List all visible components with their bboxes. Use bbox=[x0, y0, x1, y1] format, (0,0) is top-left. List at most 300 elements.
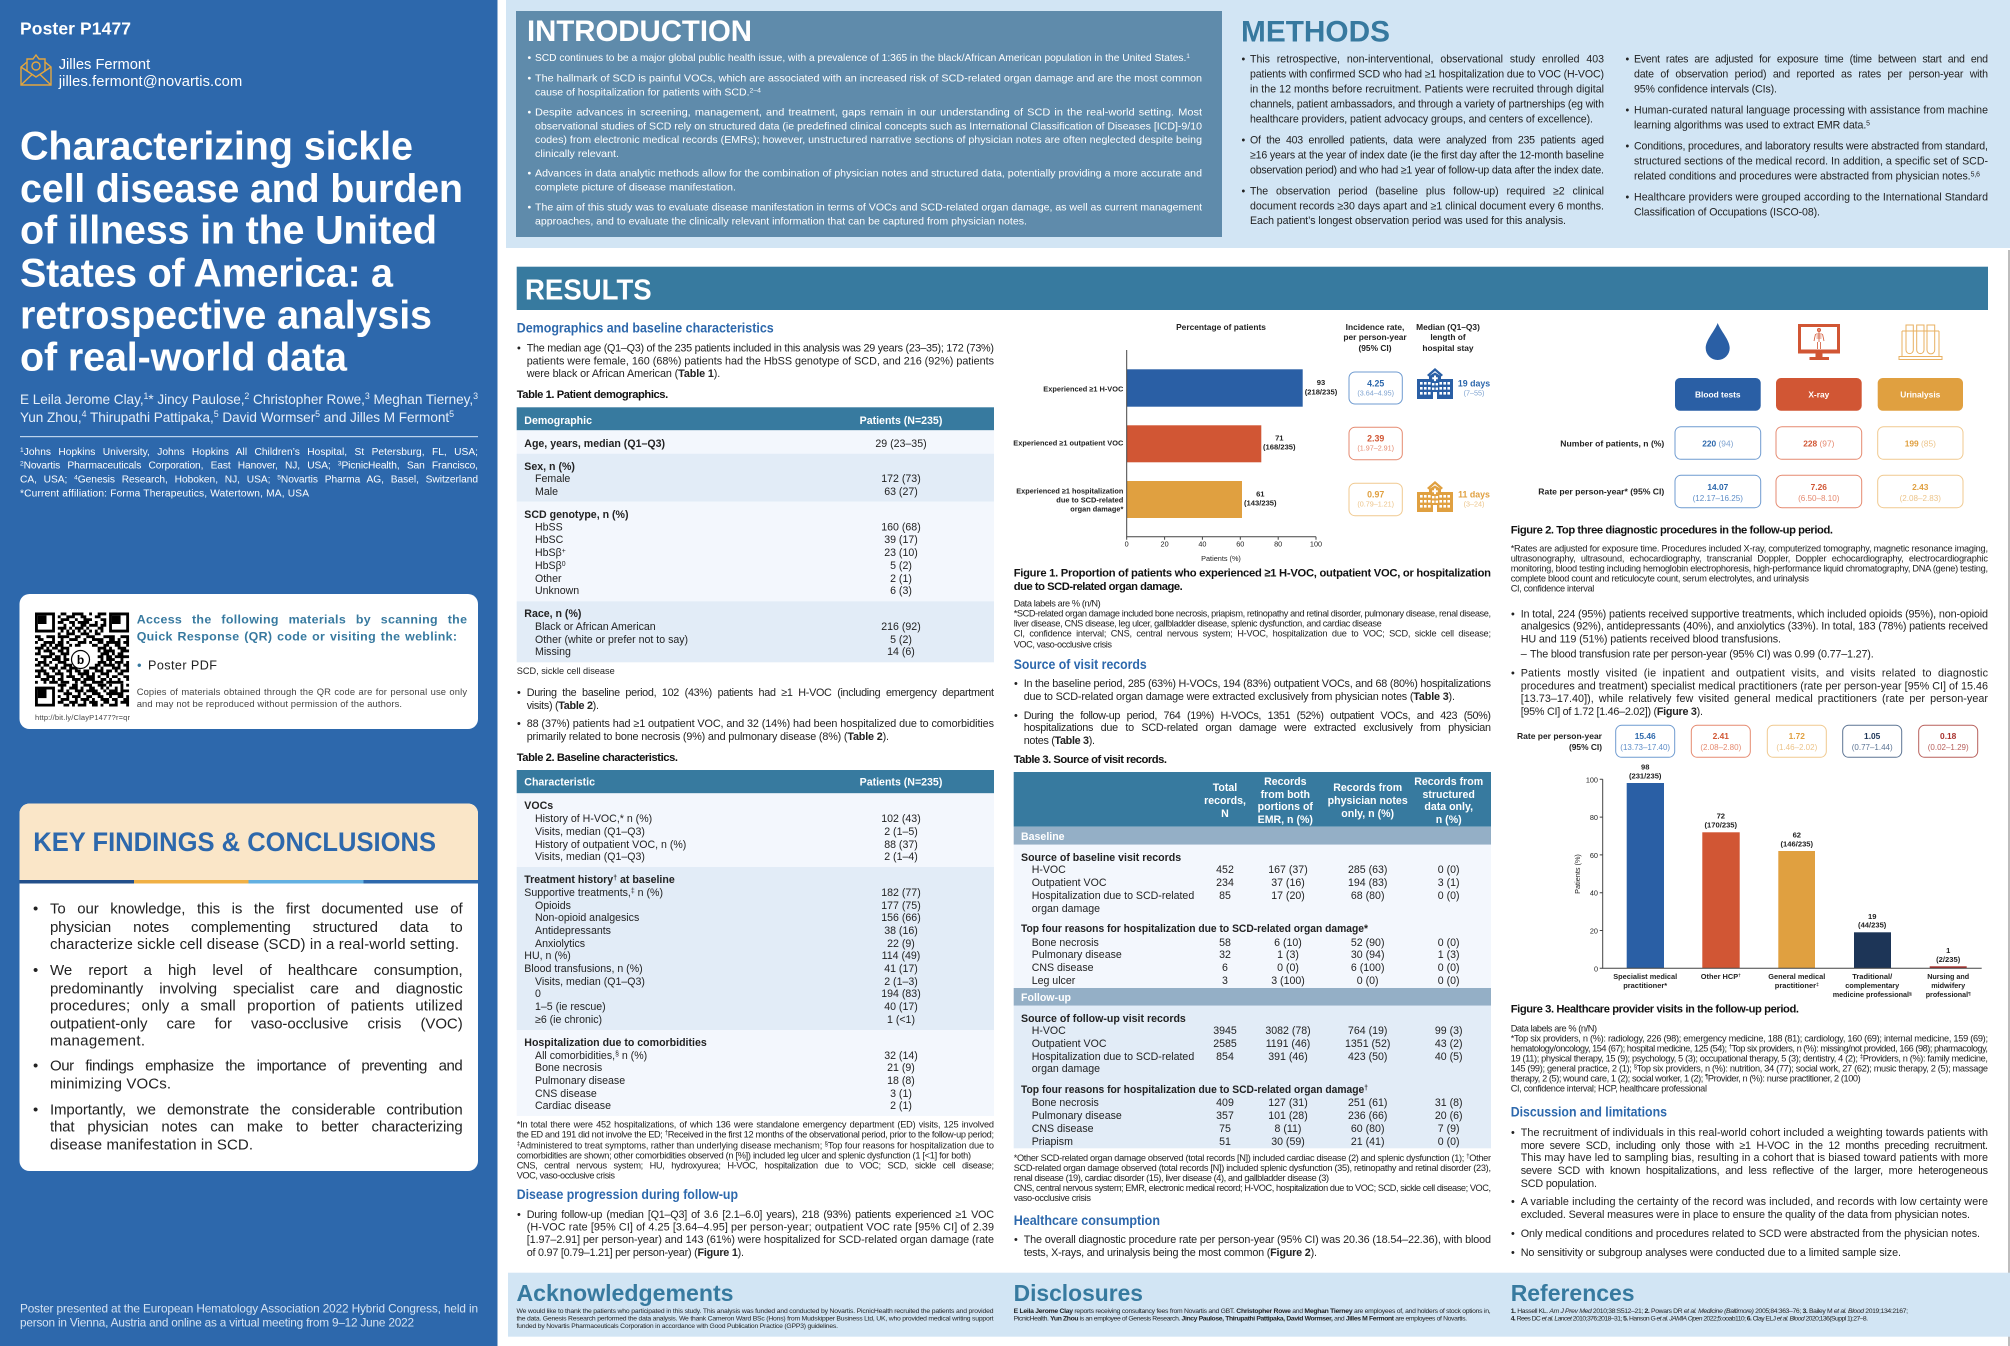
table 3: source of visit records: 3 (1) bbox=[1438, 877, 1460, 889]
table 3: source of visit records: CNS disease bbox=[1032, 1123, 1094, 1135]
figure 3 category labels: practitioner* bbox=[1623, 981, 1667, 990]
table 3: source of visit records: 37 (16) bbox=[1271, 877, 1305, 889]
figure 1 data labels: (218/235) bbox=[1305, 387, 1338, 396]
figure 1 footnotes bbox=[1014, 599, 1491, 650]
figure 3: healthcare provider visits chart bbox=[1517, 725, 1982, 999]
figure 1 category labels: Experienced ≥1 H-VOC bbox=[1043, 385, 1124, 394]
figure 1 column headers: per person-year bbox=[1343, 332, 1407, 342]
figure 2 footnotes: CI, confidence interval bbox=[1511, 583, 1594, 593]
table 1: patient demographics: 216 (92) bbox=[881, 621, 921, 633]
methods left column: • bbox=[1242, 135, 1246, 147]
table 3: source of visit records: Hospitalization due to SCD-related bbox=[1032, 1051, 1194, 1063]
table 3: source of visit records: Top four reasons for hospitalization due to SCD-related organ damage† bbox=[1021, 1084, 1368, 1096]
figure 2 caption: Figure 2. Top three diagnostic procedures in the follow-up period. bbox=[1511, 525, 1833, 537]
rate per person-year boxes: (12.17–16.25) bbox=[1693, 494, 1743, 503]
table 2: baseline characteristics: 0 bbox=[535, 988, 541, 1000]
figure 1 axis labels: 20 bbox=[1161, 540, 1169, 549]
figure 3 data labels: (2/235) bbox=[1936, 955, 1961, 964]
length of stay orange: (3–24) bbox=[1464, 500, 1484, 509]
introduction bullets: observational studies of SCD rely on structured data (ie predefined clinical concepts such as International Classification of Diseases [ICD]-9/10 bbox=[535, 120, 1202, 132]
figure 3 rate boxes: (0.02–1.29) bbox=[1928, 743, 1969, 752]
table 2: baseline characteristics: History of outpatient VOC, n (%) bbox=[535, 839, 686, 851]
figure 3 bars bbox=[1627, 783, 1967, 968]
table 3: source of visit records: 251 (61) bbox=[1348, 1097, 1387, 1109]
figure 1 footnotes: VOC, vaso-occlusive crisis bbox=[1014, 640, 1112, 650]
key findings bullets: that physician notes can make to better characterizing bbox=[50, 1118, 463, 1136]
figure 3 rate boxes: 1.05 bbox=[1864, 731, 1881, 741]
table 2: baseline characteristics: HU, n (%) bbox=[524, 950, 571, 962]
table 2: baseline characteristics: 32 (14) bbox=[884, 1050, 918, 1062]
table 3: source of visit records: 1 (3) bbox=[1277, 949, 1299, 961]
introduction bullets: clinically relevant. bbox=[535, 148, 619, 160]
introduction bullets: SCD continues to be a major global public health issue, with a prevalence of 1:365 in the black/African American population in the United States.1 bbox=[535, 52, 1190, 64]
table 2: baseline characteristics: Anxiolytics bbox=[535, 938, 585, 950]
figure 1 column headers: hospital stay bbox=[1422, 343, 1474, 353]
figure 1 data labels bbox=[1244, 378, 1338, 508]
key findings bullets: procedures; only a small proportion of patients utilized bbox=[50, 998, 463, 1014]
table 2: baseline characteristics: Patients (N=235) bbox=[860, 777, 942, 789]
introduction bullets: • bbox=[528, 52, 532, 64]
figure 3 data labels: (231/235) bbox=[1629, 771, 1662, 780]
figure 1 column headers: length of bbox=[1430, 332, 1466, 342]
table 3: source of visit records: H-VOC bbox=[1032, 864, 1066, 876]
methods right column: Classification of Occupations (ISCO-08). bbox=[1634, 207, 1820, 219]
poster number: Poster P1477 bbox=[20, 19, 131, 39]
table 3: source of visit records: 1351 (52) bbox=[1345, 1038, 1390, 1050]
figure 2: diagnostic procedures bbox=[1538, 323, 1963, 508]
figure 1 axis labels: Patients (%) bbox=[1201, 554, 1241, 563]
table 1: patient demographics: HbSβ+ bbox=[535, 547, 566, 559]
contact details bbox=[58, 57, 242, 90]
acknowledgements: funded by Novartis Pharmaceuticals Corporation in accordance with Good Publication Practice (GPP3) guidelines. bbox=[516, 1323, 838, 1330]
QR disclaimer: and may not be reproduced without permission of the authors. bbox=[137, 698, 402, 709]
table 3: source of visit records: 0 (0) bbox=[1438, 1136, 1460, 1148]
figure 2 footnotes: complete blood count and reticulocyte count, serum electrolytes, and urinalysis bbox=[1511, 573, 1809, 583]
introduction bullets: Despite advances in screening, management, and treatment, gaps remain in our understanding of SCD in the real-world setting. Most bbox=[535, 106, 1202, 118]
introduction bullets: • bbox=[528, 202, 532, 214]
table 1: patient demographics: Race, n (%) bbox=[524, 608, 581, 620]
methods left column: patients with confirmed SCD who had ≥1 hospitalization due to VOC (H-VOC) bbox=[1250, 69, 1604, 81]
figure 1 bars bbox=[1127, 369, 1303, 518]
table 1: patient demographics: 5 (2) bbox=[890, 634, 912, 646]
figure 3 rate label: Rate per person-year bbox=[1517, 731, 1603, 741]
figure 1 column headers: Incidence rate, bbox=[1346, 322, 1404, 332]
authors bbox=[20, 391, 478, 425]
source of visit records text: hospitalizations due to SCD-related organ damage were extracted exclusively from physician bbox=[1024, 722, 1491, 734]
icon: urinalysis test tubes bbox=[1899, 325, 1942, 360]
rate per person-year boxes bbox=[1675, 475, 1963, 508]
table 2: baseline characteristics: 156 (66) bbox=[881, 912, 921, 924]
congress footer: person in Vienna, Austria and online as a virtual meeting from 9–12 June 2022 bbox=[20, 1316, 414, 1330]
number of patients boxes: 228 (97) bbox=[1803, 439, 1835, 449]
table 3 footnotes bbox=[1014, 1153, 1491, 1203]
table 2: baseline characteristics: 2 (1–5) bbox=[884, 826, 918, 838]
figure 1 category labels: due to SCD-related bbox=[1056, 495, 1124, 504]
figure 3 footnotes: therapy, 2 (5); wound care, 1 (2); social worker, 1 (2); ¶Provider, n (%): nurse practitioner, 2 (100) bbox=[1511, 1073, 1861, 1083]
table 3 footnotes: renal disease (19), cardiac disorder (15), liver disease (4), and gallbladder disease (3) bbox=[1014, 1173, 1329, 1183]
demographics text: patients were female, 160 (68%) patients had the HbSS genotype of SCD, and 216 (92%) patients bbox=[527, 356, 995, 368]
figure 3 category labels: Traditional/ bbox=[1852, 972, 1893, 981]
heading: introduction: INTRODUCTION bbox=[527, 15, 752, 48]
heading: disease progression: Disease progression during follow-up bbox=[517, 1186, 738, 1202]
baseline period text: • bbox=[517, 687, 521, 699]
table 3: source of visit records: Pulmonary disease bbox=[1032, 1110, 1122, 1122]
table 3: source of visit records: 7 (9) bbox=[1438, 1123, 1460, 1135]
figure 3 rate boxes: (13.73–17.40) bbox=[1620, 743, 1670, 752]
introduction bullets: complete picture of disease manifestation. bbox=[535, 182, 736, 194]
source of visit records text: notes (Table 3). bbox=[1024, 735, 1095, 747]
key findings bullets bbox=[33, 900, 464, 1154]
rate per person-year boxes: (2.08–2.83) bbox=[1900, 494, 1941, 503]
table 2 footnotes: VOC, vaso-occlusive crisis bbox=[517, 1171, 615, 1181]
table 2: baseline characteristics bbox=[517, 770, 994, 1116]
length of stay blue: (7–55) bbox=[1464, 388, 1484, 397]
panel: QR code access card bbox=[20, 594, 478, 729]
row labels: Rate per person-year* (95% CI) bbox=[1538, 487, 1665, 497]
figure 1 footnotes: Data labels are % (n/N) bbox=[1014, 599, 1101, 609]
materials list: • bbox=[137, 658, 142, 672]
figure 1 axis labels: 100 bbox=[1310, 540, 1322, 549]
figure 1 column headers: (95% CI) bbox=[1358, 343, 1392, 353]
table 1: patient demographics: Male bbox=[535, 486, 558, 498]
acknowledgements: the data. Genesis Research performed the data analysis. We thank Cameron Ward BSc (Hons) from Mudskipper Business Ltd, UK, who provided medical writing support bbox=[516, 1315, 994, 1322]
figure 3 category labels: practitioner‡ bbox=[1775, 981, 1819, 990]
disease progression text: (H-VOC rate [95% CI] of 4.25 [3.64–4.95] per person-year; outpatient VOC rate [95% CI] of 2.39 bbox=[527, 1222, 994, 1234]
figure 3 footnotes: CI, confidence interval; HCP, healthcare professional bbox=[1511, 1083, 1707, 1093]
table 3: source of visit records: 30 (59) bbox=[1271, 1136, 1305, 1148]
table 2: baseline characteristics: 182 (77) bbox=[881, 887, 921, 899]
table 3: source of visit records: 58 bbox=[1219, 937, 1231, 949]
figure 1 incidence rate boxes: 4.25 bbox=[1367, 379, 1384, 389]
figure 2 footnotes: *Rates are adjusted for exposure time. Procedures included X-ray, computerized tomography, magnetic resonance imaging, bbox=[1511, 543, 1988, 553]
supportive treatments and provider text: – bbox=[1521, 649, 1527, 661]
discussion text: The recruitment of individuals in this real-world cohort included a weighting towards patients with bbox=[1521, 1127, 1988, 1139]
key findings bullets: Importantly, we demonstrate the considerable contribution bbox=[50, 1102, 463, 1118]
table 3: source of visit records: 0 (0) bbox=[1438, 962, 1460, 974]
figure 1 incidence rate boxes: (1.97–2.91) bbox=[1357, 443, 1394, 452]
table 3: source of visit records: Follow-up bbox=[1021, 992, 1072, 1004]
acknowledgements: Acknowledgements bbox=[516, 1280, 734, 1306]
table 3: source of visit records: Pulmonary disease bbox=[1032, 949, 1122, 961]
table 2: baseline characteristics: Bone necrosis bbox=[535, 1062, 602, 1074]
methods left column: • bbox=[1242, 186, 1246, 198]
panel: key findings and conclusions bbox=[20, 804, 478, 1171]
figure 1 category labels: Experienced ≥1 hospitalization bbox=[1016, 486, 1124, 495]
figure 2 footnotes: monitoring, blood testing including hemoglobin electrophoresis, high-performance liquid chromatography, DNA (gene) testing, bbox=[1511, 563, 1988, 573]
disclosures: PicnicHealth. Yun Zhou is an employee of Genesis Research. Jincy Paulose, Thirupathi Pattipaka, David Wormser, and Jilles M Fermont are employees of Novartis. bbox=[1014, 1315, 1467, 1322]
discussion text: severe SCD with known hospitalizations, and less reflective of the larger, more heterogeneous bbox=[1521, 1165, 1989, 1177]
table 1: patient demographics: 63 (27) bbox=[884, 486, 918, 498]
table 1: patient demographics: Patients (N=235) bbox=[860, 415, 942, 427]
discussion text: • bbox=[1511, 1228, 1515, 1240]
table 1: patient demographics: 160 (68) bbox=[881, 522, 921, 534]
table 3: source of visit records: 30 (94) bbox=[1351, 949, 1384, 961]
introduction bullets: codes) from electronic medical records (EMRs); however, unstructured narrative sections of physician notes are often neglected despite being bbox=[535, 134, 1202, 146]
figure 1 data labels: 71 bbox=[1275, 433, 1284, 442]
figure 1 data labels: 61 bbox=[1256, 489, 1265, 498]
table 3: source of visit records: Outpatient VOC bbox=[1032, 877, 1107, 889]
methods right column: Human-curated natural language processing with assistance from machine bbox=[1634, 105, 1988, 117]
table 3: source of visit records: 236 (66) bbox=[1348, 1110, 1387, 1122]
table 3: source of visit records: 0 (0) bbox=[1438, 975, 1460, 987]
QR instructions: Access the following materials by scanning the bbox=[137, 612, 467, 626]
figure 1 footnotes: CI, confidence interval; CNS, central nervous system; H-VOC, hospitalization due to VOC; SCD, sickle cell disease; bbox=[1014, 629, 1491, 639]
table 3: source of visit records: 167 (37) bbox=[1268, 864, 1308, 876]
methods left column: healthcare providers, patient advocacy groups, and centers of excellence). bbox=[1250, 114, 1593, 126]
methods left column: Of the 403 enrolled patients, data were analyzed from 235 patients aged bbox=[1250, 135, 1604, 147]
introduction bullets: The hallmark of SCD is painful VOCs, which are associated with an increased risk of SCD-related organ damage and are the most common bbox=[535, 72, 1202, 84]
figure 3 footnotes: *Top six providers, n (%): radiology, 226 (98); emergency medicine, 188 (81); cardiology, 160 (69); internal medicine, 159 (69); bbox=[1511, 1033, 1988, 1043]
authors: Yun Zhou,4 Thirupathi Pattipaka,5 David Wormser5 and Jilles M Fermont5 bbox=[20, 409, 454, 425]
baseline period text: • bbox=[517, 718, 521, 730]
table 3: source of visit records: 3 (100) bbox=[1271, 975, 1305, 987]
supportive treatments and provider text: [13.73–17.40]), while relatively few visited general medical practitioners (rate per person-year bbox=[1521, 693, 1988, 705]
table 2: baseline characteristics: 40 (17) bbox=[884, 1001, 918, 1013]
table 3: source of visit records: Bone necrosis bbox=[1032, 937, 1099, 949]
figure 3 rate label: (95% CI) bbox=[1569, 742, 1602, 752]
table 2: baseline characteristics: 1 (<1) bbox=[887, 1014, 915, 1026]
disease progression text bbox=[517, 1209, 994, 1259]
table 3: source of visit records: 60 (80) bbox=[1351, 1123, 1384, 1135]
key findings bullets: management. bbox=[50, 1032, 145, 1050]
table 1: patient demographics: Other bbox=[535, 573, 562, 585]
figure 1 caption bbox=[1014, 568, 1491, 593]
table 3: source of visit records: Baseline bbox=[1021, 831, 1065, 843]
figure 1 footnotes: *SCD-related organ damage included bone necrosis, priapism, retinopathy and retinal disorder, pulmonary disease, renal disease, bbox=[1014, 609, 1491, 619]
figure 3 data labels: 19 bbox=[1868, 912, 1876, 921]
table 3: source of visit records: 3 bbox=[1222, 975, 1228, 987]
figure 3 category labels: midwifery bbox=[1931, 981, 1966, 990]
methods right column: Healthcare providers were grouped according to the International Standard bbox=[1634, 192, 1988, 204]
table 3: source of visit records: 409 bbox=[1216, 1097, 1234, 1109]
figure 3 data labels: 98 bbox=[1641, 762, 1649, 771]
figure 1 axis labels: 80 bbox=[1274, 540, 1282, 549]
source of visit records text bbox=[1014, 678, 1492, 747]
figure 1 category labels: organ damage* bbox=[1070, 504, 1123, 513]
references: 1. Hassell KL. Am J Prev Med 2010;38:S512–21; 2. Powars DR et al. Medicine (Baltimore) 2005;84:363–76; 3. Bailey M et al. Blood 2019;134:2167; bbox=[1511, 1308, 1908, 1315]
table 3: source of visit records: 2585 bbox=[1213, 1038, 1237, 1050]
key findings bullets: We report a high level of healthcare consumption, bbox=[50, 962, 463, 979]
figure 3 category labels: professional¶ bbox=[1926, 990, 1971, 999]
table 2: baseline characteristics: 2 (1–4) bbox=[884, 851, 918, 863]
disclosures: E Leila Jerome Clay reports receiving consultancy fees from Novartis and GBT. Christopher Rowe and Meghan Tierney are employees of, and holders of stock options in, bbox=[1014, 1308, 1491, 1315]
table 3: source of visit records: 0 (0) bbox=[1438, 864, 1460, 876]
acknowledgements: We would like to thank the patients who participated in this study. This analysis was funded and conducted by Novartis. PicnicHealth recruited the patients and provided bbox=[516, 1308, 994, 1315]
disease progression text: During follow-up (median [Q1–Q3] of 3.6 [2.1–6.0] years), 218 (93%) patients experienced ≥1 VOC bbox=[527, 1209, 994, 1221]
supportive treatments and provider text: procedures and treatment) specialist medical practitioners (rate per person-year [95% CI] of 15.46 bbox=[1521, 681, 1988, 693]
table 2: baseline characteristics: 114 (49) bbox=[882, 950, 920, 962]
header pills: X-ray bbox=[1808, 390, 1830, 400]
table 3: source of visit records: 234 bbox=[1216, 877, 1234, 889]
table 3: source of visit records bbox=[1014, 772, 1491, 1148]
figure 2 footnotes: ultrasonography, ultrasound, echocardiography, transcranial Doppler, Doppler echocardiography, electrocardiographic bbox=[1511, 553, 1988, 563]
introduction bullets: cause of hospitalization for patients with SCD.2–4 bbox=[535, 86, 761, 98]
icon: email envelope bbox=[21, 55, 51, 85]
baseline period text: primarily related to bone necrosis (9%) and pulmonary disease (8%) (Table 2). bbox=[527, 731, 889, 743]
methods left column: in the 12 months before recruitment. Patients were recruited through digital bbox=[1250, 84, 1604, 96]
table 3: source of visit records: 6 bbox=[1222, 962, 1228, 974]
header pills: Urinalysis bbox=[1900, 390, 1941, 400]
table 1: patient demographics: 14 (6) bbox=[887, 646, 915, 658]
table 3 footnotes: SCD-related organ damage observed (total records [N]) included splenic dysfunction (35), retinopathy and retinal disorder (23), bbox=[1014, 1163, 1491, 1173]
figure 1 category labels bbox=[1013, 385, 1124, 513]
references: 4. Rees DC et al. Lancet 2010;376:2018–31; 5. Hanson G et al. JAMIA Open 2022;5:ooab110; 6. Clay ELJ et al. Blood 2020;136(Suppl 1):27–8. bbox=[1511, 1315, 1868, 1322]
supportive treatments and provider text: Patients mostly visited (ie inpatient and outpatient visits, and visits related to diagnostic bbox=[1521, 668, 1989, 680]
key findings bullets: Our findings emphasize the importance of preventing and bbox=[50, 1058, 463, 1074]
table 1: patient demographics bbox=[517, 407, 994, 662]
table 2: baseline characteristics: History of H-VOC,* n (%) bbox=[535, 813, 652, 825]
rate per person-year boxes: 2.43 bbox=[1912, 482, 1929, 492]
table 2: baseline characteristics: CNS disease bbox=[535, 1088, 597, 1100]
table 1: patient demographics: 5 (2) bbox=[890, 560, 912, 572]
table 3: source of visit records: Records bbox=[1264, 776, 1307, 788]
table 3: source of visit records: 0 (0) bbox=[1277, 962, 1299, 974]
affiliations bbox=[20, 446, 478, 499]
discussion text: • bbox=[1511, 1196, 1515, 1208]
table 3: source of visit records: portions of bbox=[1258, 801, 1313, 813]
table 3 footnotes: CNS, central nervous system; EMR, electronic medical record; H-VOC, hospitalization due to VOC; SCD, sickle cell disease; VOC, bbox=[1014, 1183, 1491, 1193]
title bbox=[20, 125, 463, 380]
methods left column: channels, patient ambassadors, and through a variety of partnerships (eg with bbox=[1250, 99, 1604, 111]
QR instructions: Quick Response (QR) code or visiting the weblink: bbox=[137, 630, 457, 644]
table 3: source of visit records: 52 (90) bbox=[1351, 937, 1384, 949]
figure 3 footnotes: Data labels are % (n/N) bbox=[1511, 1023, 1597, 1033]
icon: QR code bbox=[35, 614, 129, 705]
number of patients boxes: 199 (85) bbox=[1905, 439, 1936, 449]
congress footer: Poster presented at the European Hematology Association 2022 Hybrid Congress, held in bbox=[20, 1302, 478, 1316]
table 3: source of visit records: 6 (10) bbox=[1274, 937, 1302, 949]
table 2: baseline characteristics: Hospitalization due to comorbidities bbox=[524, 1037, 707, 1049]
table 3: source of visit records: 285 (63) bbox=[1348, 864, 1387, 876]
panel: methods bbox=[1241, 16, 1988, 227]
table 2: baseline characteristics: Visits, median (Q1–Q3) bbox=[535, 976, 645, 988]
table 3: source of visit records: 3945 bbox=[1213, 1025, 1237, 1037]
table 2 footnotes: the ED and 191 did not involve the ED; †Received in the first 12 months of the observational period, prior to the follow-up period; bbox=[517, 1130, 994, 1140]
table 1: patient demographics: 2 (1) bbox=[890, 573, 912, 585]
table 2 footnotes: CNS, central nervous system; HU, hydroxyurea; H-VOC, hospitalization due to VOC; SCD, sickle cell disease; bbox=[517, 1161, 994, 1171]
figure 1 column headers: Median (Q1–Q3) bbox=[1416, 322, 1480, 332]
healthcare consumption text bbox=[1014, 1234, 1491, 1259]
table 2: baseline characteristics: 3 (1) bbox=[890, 1088, 912, 1100]
table 2: baseline characteristics: 194 (83) bbox=[881, 988, 921, 1000]
table 2: baseline characteristics: 38 (16) bbox=[884, 925, 918, 937]
icon: blood drop bbox=[1706, 323, 1730, 360]
length of stay orange: 11 days bbox=[1458, 490, 1490, 500]
key findings bullets: • bbox=[33, 1058, 38, 1074]
supportive treatments and provider text: In total, 224 (95%) patients received supportive treatments, which included opioids (95%), non-opioid bbox=[1521, 609, 1988, 621]
heading: source of visit records: Source of visit records bbox=[1014, 656, 1147, 672]
figure 3 axis labels: 80 bbox=[1590, 813, 1598, 822]
introduction bullets: • bbox=[528, 72, 532, 84]
icon: hospital blue bbox=[1417, 368, 1453, 399]
figure 3 axes bbox=[1600, 779, 1982, 968]
supportive treatments and provider text: [95% CI] of 1.72 [1.46–2.02]) (Figure 3). bbox=[1521, 706, 1703, 718]
supportive treatments and provider text: analgesics (92%), antidepressants (40%), and anxiolytics (33%). In total, 183 (78%) patients received bbox=[1521, 621, 1988, 633]
acknowledgements bbox=[516, 1280, 994, 1330]
table 3: source of visit records: 452 bbox=[1216, 864, 1234, 876]
table 1: patient demographics: Unknown bbox=[535, 585, 579, 597]
table 3: source of visit records: Top four reasons for hospitalization due to SCD-related organ damage* bbox=[1021, 923, 1369, 935]
figure 3 category labels: medicine professional§ bbox=[1833, 990, 1912, 999]
table 3: source of visit records: 0 (0) bbox=[1438, 890, 1460, 902]
heading: healthcare consumption: Healthcare consumption bbox=[1014, 1212, 1160, 1228]
table 1: patient demographics: 172 (73) bbox=[881, 473, 921, 485]
key findings bullets: To our knowledge, this is the first documented use of bbox=[50, 900, 464, 918]
figure 1: proportion of patients chart bbox=[1013, 322, 1490, 563]
table 3: source of visit records: 764 (19) bbox=[1348, 1025, 1387, 1037]
table 1: patient demographics: Other (white or prefer not to say) bbox=[535, 634, 688, 646]
key findings bullets: • bbox=[33, 962, 38, 979]
table 3: source of visit records: from both bbox=[1261, 789, 1310, 801]
table 2: baseline characteristics: Opioids bbox=[535, 900, 571, 912]
table 2: baseline characteristics: Antidepressants bbox=[535, 925, 611, 937]
baseline period text bbox=[517, 687, 995, 743]
table 1 footnote: SCD, sickle cell disease bbox=[517, 666, 615, 676]
affiliations: CA, USA; 4Genesis Research, Hoboken, NJ, USA; 5Novartis Pharma AG, Basel, Switzerland bbox=[20, 474, 478, 486]
methods left column: observation period) and who had ≥1 year of follow-up data after the index date. bbox=[1250, 165, 1604, 177]
figure 3 category labels: General medical bbox=[1768, 972, 1825, 981]
figure 1 axes bbox=[1127, 350, 1316, 540]
table 3: source of visit records: 101 (28) bbox=[1268, 1110, 1308, 1122]
QR instructions bbox=[137, 612, 467, 644]
figure 1 column headers bbox=[1176, 322, 1480, 353]
table 3: source of visit records: 21 (41) bbox=[1351, 1136, 1384, 1148]
table 2 footnotes bbox=[517, 1120, 994, 1181]
discussion text: Only medical conditions and procedures related to SCD were abstracted from the physician notes. bbox=[1521, 1228, 1980, 1240]
disclosures bbox=[1014, 1280, 1491, 1322]
table 3: source of visit records: 68 (80) bbox=[1351, 890, 1384, 902]
discussion text: more severe SCD, including only those with ≥1 H-VOC in the 12 months preceding recruitment. bbox=[1521, 1140, 1988, 1152]
table 2 footnotes: comorbidities are shown; other comorbidities observed (n [%]) included leg ulcer and splenic dysfunction (1 [<1] for both) bbox=[517, 1151, 971, 1161]
figure 2 footnotes bbox=[1511, 543, 1988, 593]
methods right column: • bbox=[1626, 105, 1630, 117]
title: of real-world data bbox=[20, 336, 348, 380]
table 3: source of visit records: records, bbox=[1204, 795, 1246, 807]
results banner bbox=[517, 267, 1988, 310]
methods right column: • bbox=[1626, 54, 1630, 66]
figure 3 category labels: Specialist medical bbox=[1613, 972, 1677, 981]
discussion text bbox=[1511, 1127, 1989, 1259]
table 2: baseline characteristics: 2 (1) bbox=[890, 1100, 912, 1112]
table 3: source of visit records: organ damage bbox=[1032, 1063, 1100, 1075]
table 2: baseline characteristics: 2 (1–3) bbox=[884, 976, 918, 988]
supportive treatments and provider text bbox=[1511, 609, 1989, 718]
table 3: source of visit records: 40 (5) bbox=[1435, 1051, 1463, 1063]
key findings bullets: predominantly involving specialist care and diagnostic bbox=[50, 980, 463, 998]
figure 3 rate boxes: 1.72 bbox=[1789, 731, 1805, 741]
table 2: baseline characteristics: 18 (8) bbox=[887, 1075, 915, 1087]
methods right column: structured sections of the medical record. In addition, a specific set of SCD- bbox=[1634, 156, 1988, 168]
number of patients boxes: 220 (94) bbox=[1702, 439, 1734, 449]
methods left column: • bbox=[1242, 54, 1246, 66]
table 1 caption: Table 1. Patient demographics. bbox=[517, 389, 668, 401]
figure 1 axis labels: 60 bbox=[1236, 540, 1244, 549]
table 1: patient demographics: 6 (3) bbox=[890, 585, 912, 597]
QR disclaimer: Copies of materials obtained through the QR code are for personal use only bbox=[137, 686, 467, 697]
table 1: patient demographics: HbSβ0 bbox=[535, 560, 566, 572]
table 2 caption: Table 2. Baseline characteristics. bbox=[517, 752, 678, 764]
key findings bullets: • bbox=[33, 1102, 38, 1118]
materials list: Poster PDF bbox=[148, 658, 217, 672]
table 3: source of visit records: only, n (%) bbox=[1341, 808, 1394, 820]
icon: hospital orange bbox=[1417, 481, 1453, 512]
header pills bbox=[1675, 378, 1963, 411]
table 2: baseline characteristics: 88 (37) bbox=[884, 839, 918, 851]
figure 1 column headers: Percentage of patients bbox=[1176, 322, 1266, 332]
figure 3 axis labels: Patients (%) bbox=[1573, 854, 1582, 894]
methods left column: document records ≥30 days apart and ≥1 clinical document every 6 months. bbox=[1250, 201, 1604, 213]
table 1: patient demographics: Age, years, median (Q1–Q3) bbox=[524, 438, 665, 450]
